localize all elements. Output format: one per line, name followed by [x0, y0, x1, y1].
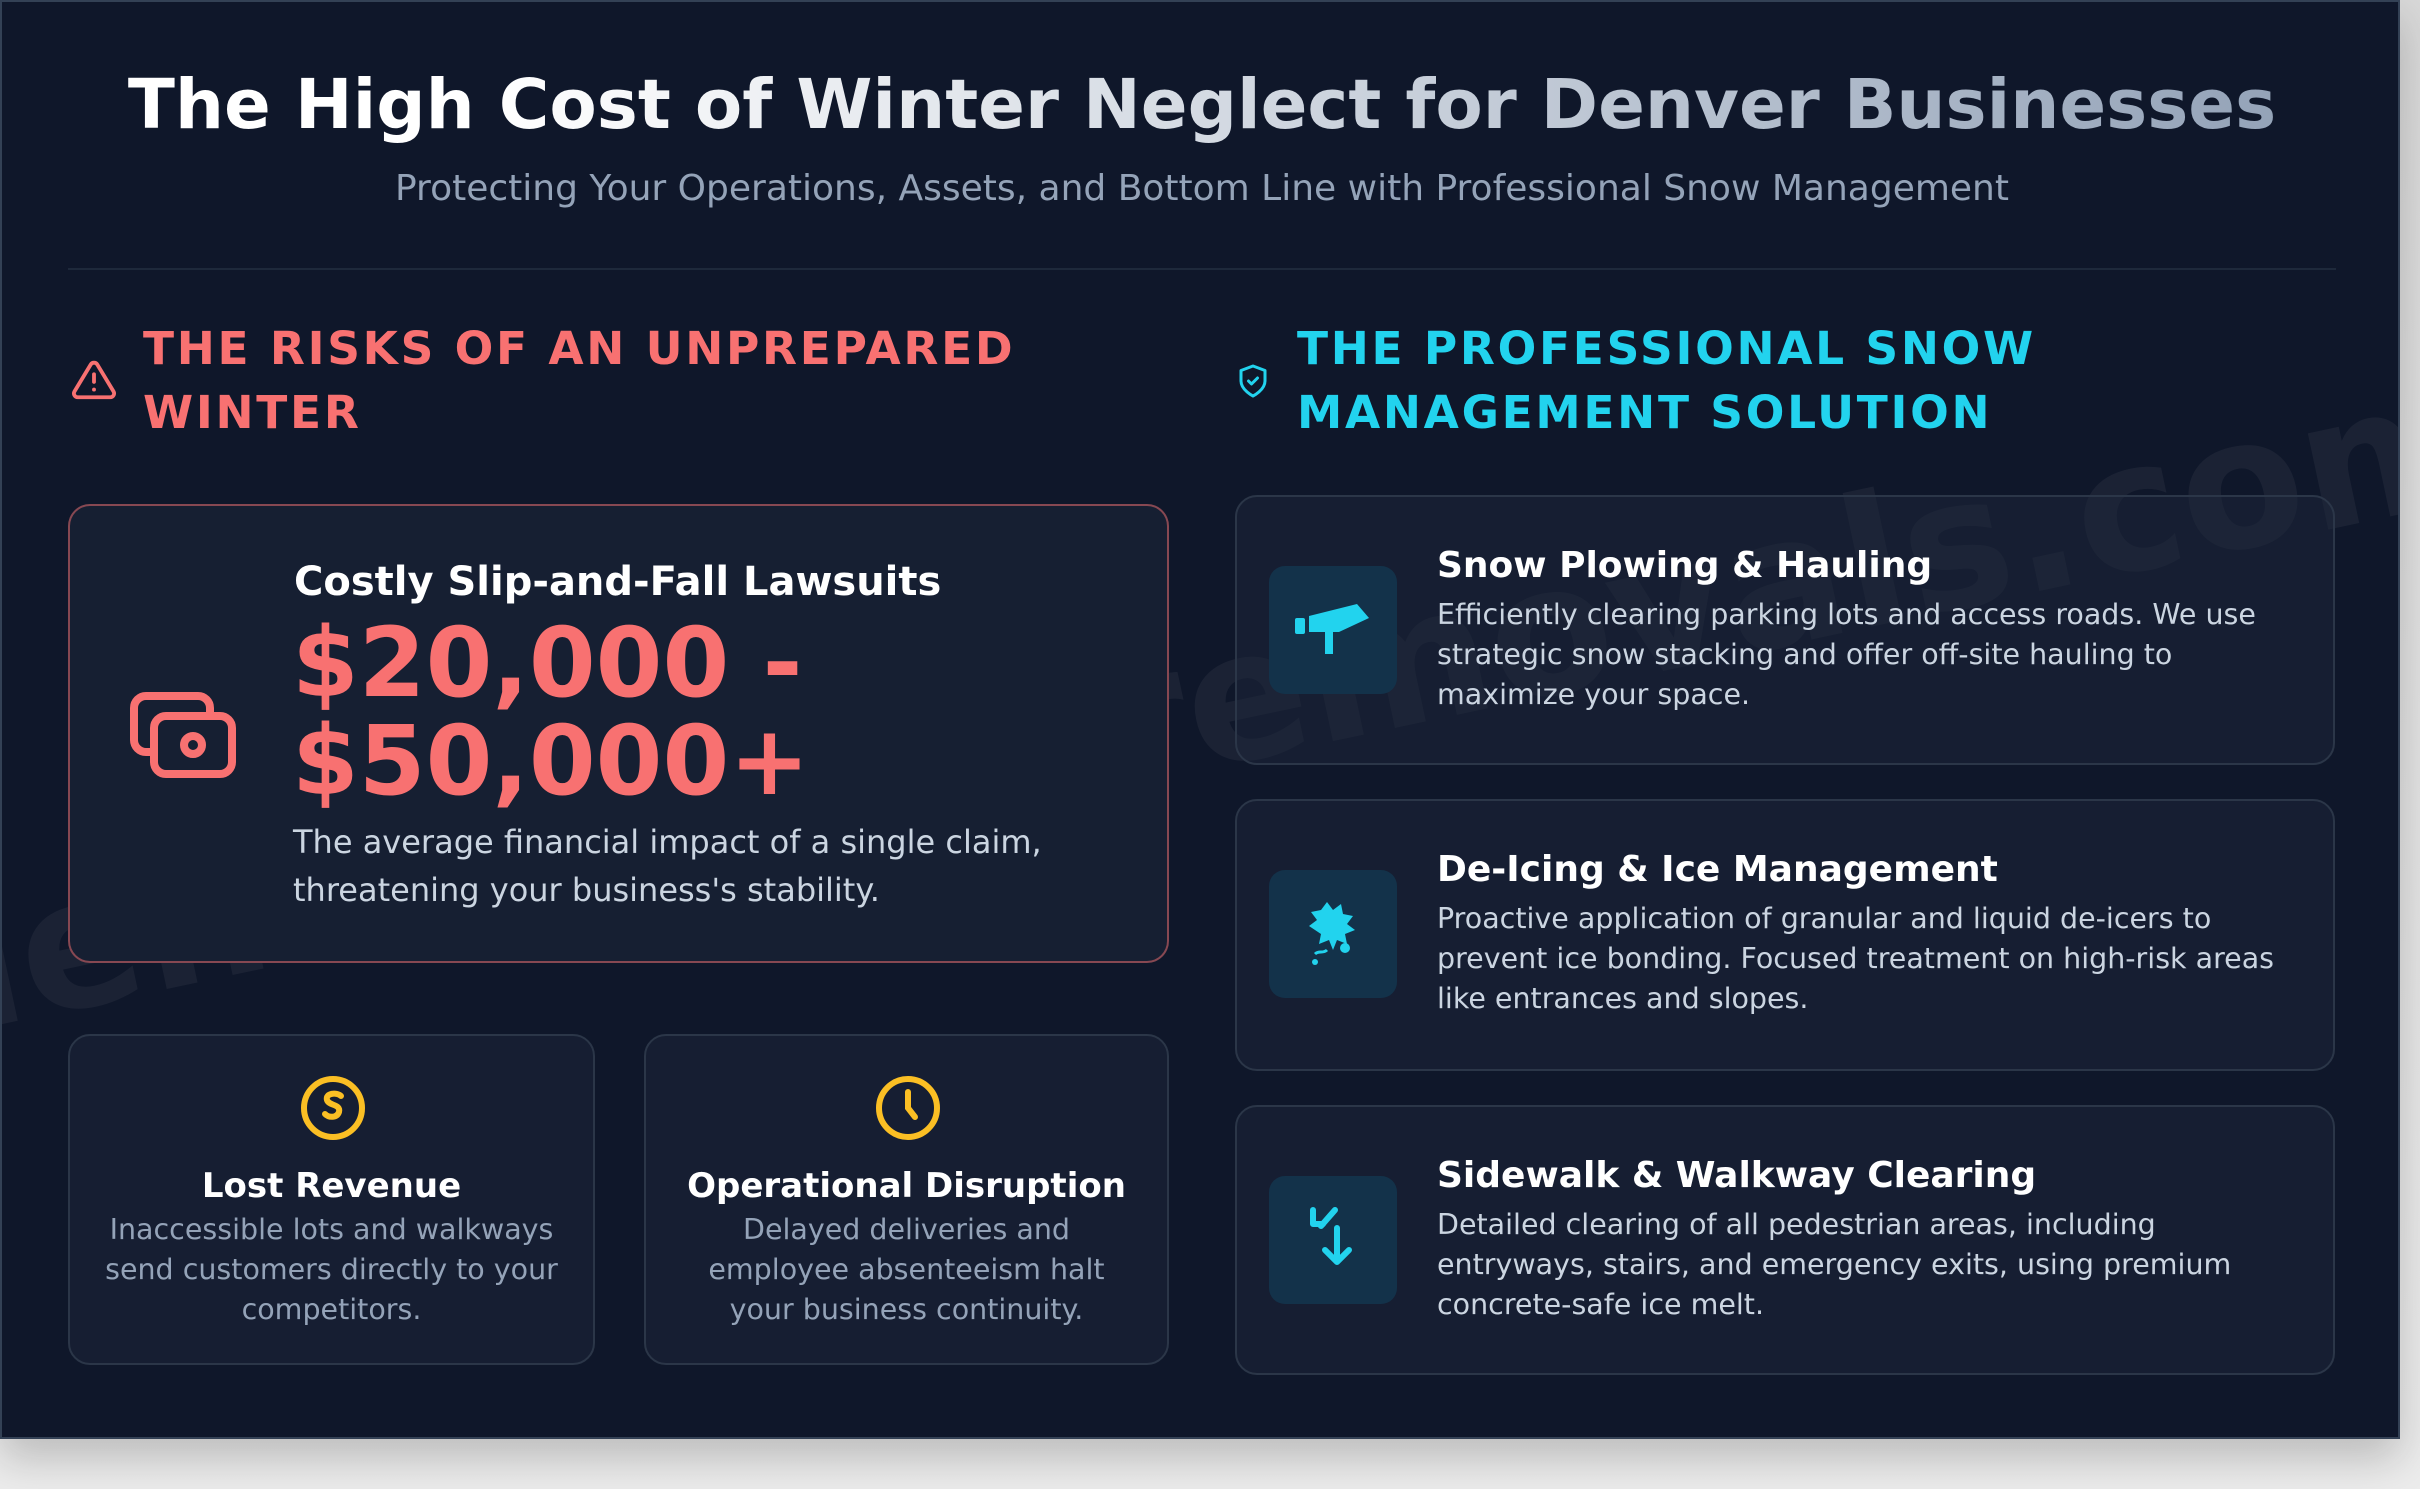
description	[1437, 598, 2256, 711]
description: strategic snow stacking and offer off-site hauling to	[1437, 638, 2172, 671]
description: Inaccessible lots and walkways	[110, 1213, 553, 1246]
heading: solution: THE PROFESSIONAL SNOW	[1297, 322, 2036, 375]
description: employee absenteeism halt	[708, 1253, 1105, 1286]
icon: ice	[1269, 870, 1397, 998]
panel: lawsuits card	[68, 504, 1169, 963]
description: entryways, stairs, and emergency exits, using premium	[1437, 1248, 2231, 1281]
description: send customers directly to your	[105, 1253, 558, 1286]
heading: risks: THE RISKS OF AN UNPREPARED	[143, 322, 1015, 375]
title: Sidewalk & Walkway Clearing	[1437, 1155, 2036, 1196]
panel: sidewalk clearing	[1235, 1105, 2335, 1375]
icon: plow	[1269, 566, 1397, 694]
description: Detailed clearing of all pedestrian areas, including	[1437, 1208, 2156, 1241]
heading: risks: WINTER	[143, 386, 362, 439]
icon: walkway arrow	[1269, 1176, 1397, 1304]
description: competitors.	[242, 1293, 421, 1326]
title: De-Icing & Ice Management	[1437, 849, 1998, 890]
description	[1437, 902, 2274, 1015]
title: The High Cost of Winter Neglect for Denver Businesses	[128, 65, 2276, 145]
description: your business continuity.	[730, 1293, 1083, 1326]
description: concrete-safe ice melt.	[1437, 1288, 1764, 1321]
figure	[292, 607, 810, 817]
panel: lost revenue	[68, 1034, 595, 1365]
heading: solution: MANAGEMENT SOLUTION	[1297, 386, 1992, 439]
icon: shield	[1240, 364, 1266, 398]
title: Lost Revenue	[202, 1166, 461, 1206]
description	[1437, 1208, 2231, 1321]
icon: warning	[72, 360, 116, 400]
description: Efficiently clearing parking lots and access roads. We use	[1437, 598, 2256, 631]
title: Snow Plowing & Hauling	[1437, 545, 1932, 586]
description	[105, 1213, 558, 1326]
description: Delayed deliveries and	[743, 1213, 1070, 1246]
heading: solution	[1240, 322, 2036, 439]
description: Proactive application of granular and liquid de-icers to	[1437, 902, 2211, 935]
panel: snow plowing	[1235, 495, 2335, 765]
title: Operational Disruption	[687, 1166, 1126, 1206]
figure: $50,000+	[292, 705, 810, 817]
description: prevent ice bonding. Focused treatment on high-risk areas	[1437, 942, 2274, 975]
description: like entrances and slopes.	[1437, 982, 1808, 1015]
subtitle: Protecting Your Operations, Assets, and Bottom Line with Professional Snow Management	[395, 168, 2009, 209]
description	[708, 1213, 1105, 1326]
figure: $20,000 -	[292, 607, 803, 719]
description: maximize your space.	[1437, 678, 1750, 711]
icon: dollar circle	[301, 1076, 365, 1140]
title: Costly Slip-and-Fall Lawsuits	[294, 559, 941, 605]
description: threatening your business's stability.	[293, 871, 880, 909]
description: The average financial impact of a single claim,	[293, 823, 1042, 861]
panel: operational disruption	[644, 1034, 1169, 1365]
icon: clock	[876, 1076, 940, 1140]
icon: money	[130, 692, 236, 778]
panel: de-icing	[1235, 799, 2335, 1071]
heading: risks	[72, 322, 1015, 439]
description	[292, 823, 1042, 909]
